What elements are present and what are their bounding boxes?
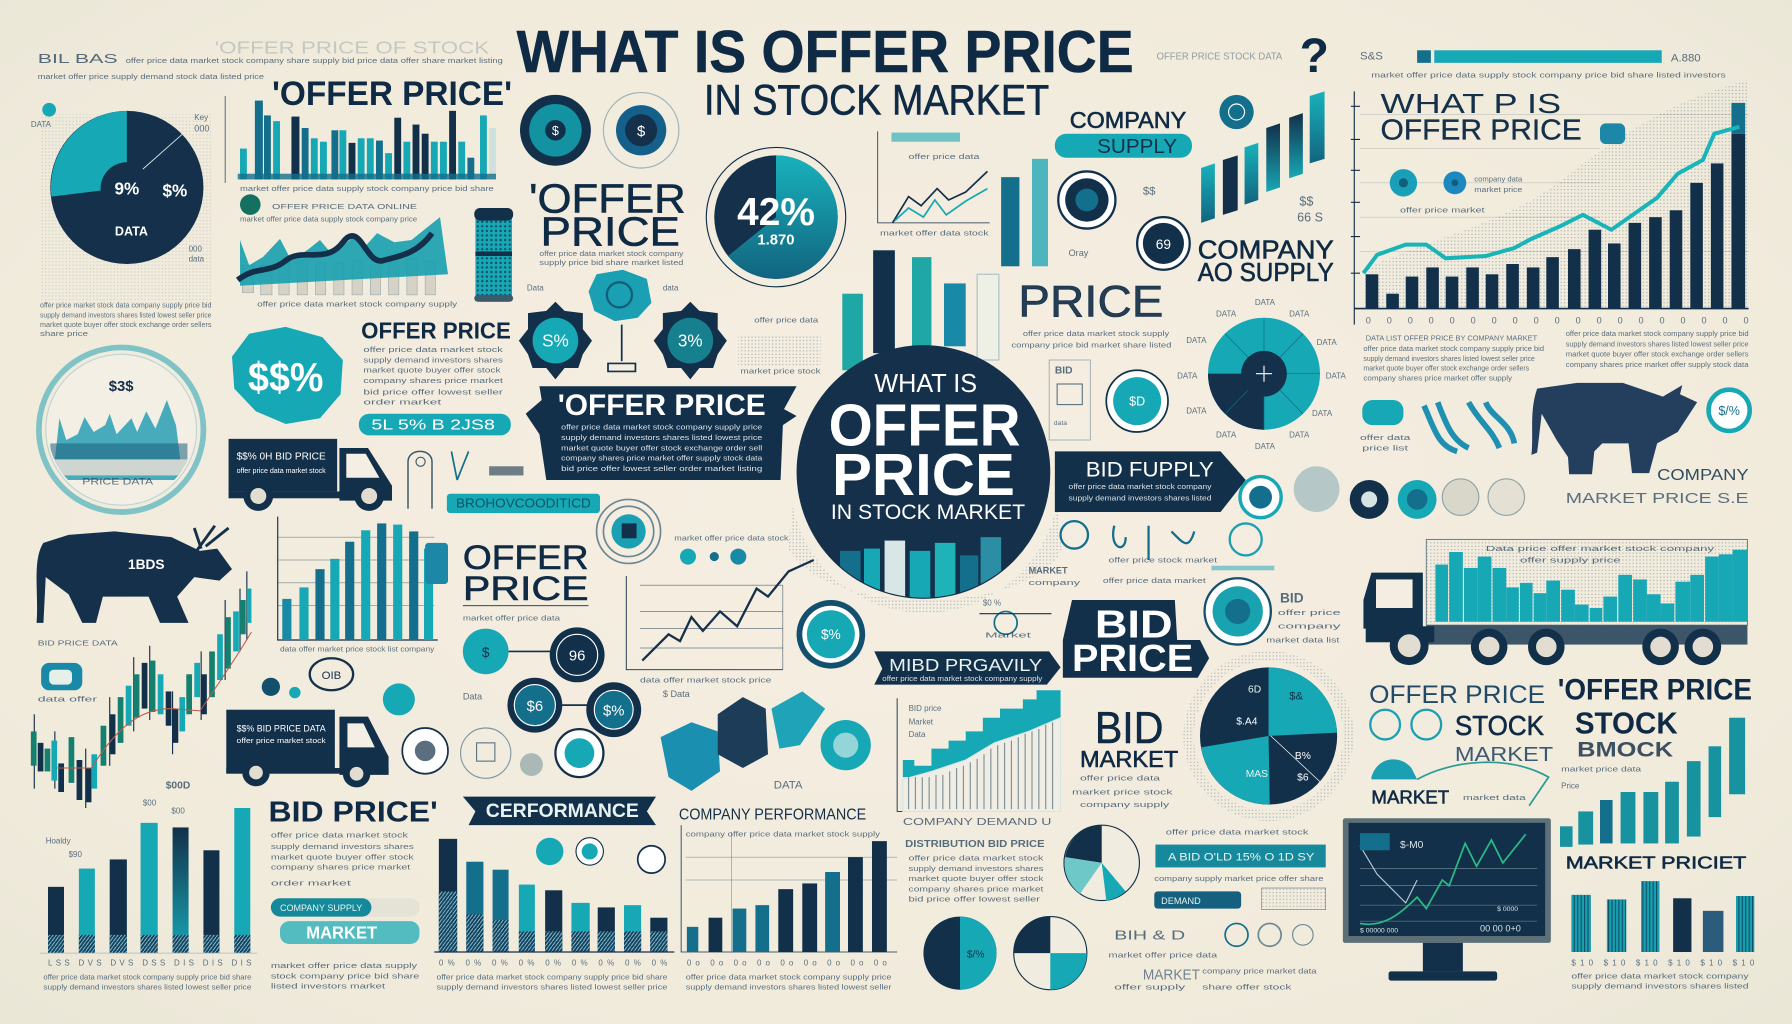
connected circle badges: $% (603, 703, 624, 719)
icons: small left group: OIB (322, 670, 341, 682)
title (517, 18, 1329, 123)
panel: teal bars with text: company supply market price offer share (1154, 874, 1323, 883)
heading: company supply pill: SUPPLY (1097, 135, 1177, 158)
small text block with box: market price stock (741, 367, 821, 376)
circle: skyline: PRICE DATA (82, 477, 154, 487)
big rising chart: OFFER PRICE (1381, 114, 1582, 146)
heading: offer price stock market left: STOCK (1455, 710, 1544, 741)
top-left header strip (38, 38, 503, 81)
badge: teal ring: $% (821, 627, 841, 642)
text block: left: market quote buyer offer stock exchange order sellers (40, 320, 212, 329)
ribbon: offer price (526, 386, 797, 480)
panel: teal bars with text: A BID O'LD 15% O 1D SY (1168, 852, 1315, 864)
text block: left: share price (40, 329, 88, 338)
ribbon: offer price: offer price data market stock company supply price (561, 423, 762, 432)
pie chart: top left: Key (194, 113, 208, 122)
radial pie with labels: DATA (1317, 338, 1337, 347)
text and icons: bottom centre-right: market offer price data (1109, 951, 1218, 960)
top-right progress strip: market offer price data supply stock company price bid share listed investors (1371, 71, 1726, 80)
title: OFFER PRICE STOCK DATA (1157, 51, 1282, 62)
small text block with box (738, 315, 821, 376)
ribbon: offer price: supply demand investors shares listed lowest price (561, 433, 762, 442)
radial pie with labels: DATA (1216, 310, 1237, 319)
text block: bid price: BID PRICE' (269, 797, 438, 829)
text block: left (40, 300, 212, 338)
top-left header strip: offer price data market stock company share supply bid price data offer share market listing (126, 56, 503, 65)
chart: teal steps: Market (909, 718, 934, 727)
text block: bid price: COMPANY SUPPLY (280, 903, 362, 913)
pie chart: big quadrants: B% (1295, 751, 1311, 762)
heading: offer price stock market left (1369, 681, 1554, 807)
blue wave icons and row of circles (1240, 400, 1525, 519)
text block: offer price: company shares price market (363, 376, 503, 385)
radial pie with labels: DATA (1255, 442, 1276, 451)
bar chart: bottom right striped: offer price data market stock company (1571, 971, 1749, 980)
connected circle badges (461, 627, 641, 778)
badge: bid price: BID (1095, 604, 1173, 647)
heading: bid market: offer price data (1080, 774, 1161, 783)
text and icons: bottom centre-right: BIH & D (1114, 928, 1185, 942)
area chart with label and can icon: offer price data market stock company supply (257, 299, 458, 308)
heading: offer price stock market left: MARKET (1455, 743, 1554, 766)
heading: offer price lower: OFFER (463, 539, 589, 577)
radial pie with labels: DATA (1216, 431, 1237, 440)
circle: skyline (39, 347, 203, 512)
pie charts: small trio: $/% (967, 950, 985, 961)
bar chart: bottom left: LSS DVS DVS DSS DIS DIS DIS (48, 959, 251, 968)
icons and text near badge: company (1278, 622, 1341, 631)
blue wave icons and row of circles: offer data (1360, 433, 1412, 442)
icon: small teal medallion with box: data (1054, 420, 1067, 427)
big percentage circle: 1.870 (757, 233, 795, 249)
bar chart: company performance: supply demand investors shares listed lowest seller (686, 983, 892, 992)
ribbon: offer price: bid price offer lowest seller order market listing (561, 464, 762, 473)
text block: offer price (359, 317, 511, 435)
ribbon: bid supply (1055, 451, 1246, 512)
bar chart: bottom right striped: supply demand investors shares listed (1571, 982, 1749, 991)
stock monitor (1343, 818, 1551, 981)
panel: teal bars with text: DEMAND (1161, 896, 1201, 906)
text block: offer price: supply demand investors shares (363, 355, 503, 364)
pie chart: top left: data (189, 255, 205, 264)
text block: offer price: OFFER PRICE (361, 317, 511, 343)
text blocks under big chart: supply demand investors shares listed lowest seller price (1566, 339, 1749, 348)
radial pie with labels: DATA (1186, 407, 1207, 416)
text blocks under big chart (1363, 329, 1749, 383)
icons and text near badge: offer price (1278, 608, 1341, 617)
icons: company circles: $$ (1143, 185, 1156, 197)
pie chart: big quadrants (1189, 656, 1349, 816)
pie chart: big quadrants: $.A4 (1236, 717, 1258, 728)
bar chart: bottom left: $00 (171, 807, 185, 816)
bar chart: bottom right striped: $10 $10 $10 $10 $10 $10 (1571, 959, 1755, 968)
central circle: WHAT IS (874, 368, 977, 398)
bull: right: COMPANY (1657, 467, 1749, 484)
pie chart: big quadrants: MAS (1246, 769, 1268, 780)
big rising chart: offer price market (1400, 206, 1485, 215)
heading: offer price lower: market offer price data (463, 614, 561, 623)
heading: company supply: AO SUPPLY (1198, 257, 1334, 287)
ribbon: performance: CERFORMANCE (486, 800, 639, 822)
ribbon: bid supply: supply demand investors shares listed (1069, 494, 1211, 503)
text block: bottom centre-right: bid price offer lowest seller (909, 895, 1041, 904)
radial pie with labels: DATA (1289, 431, 1310, 440)
heading: price: company price bid market share listed (1011, 340, 1171, 349)
badge: teal splotch: Data (527, 283, 544, 292)
pie chart: top left: 9% (114, 178, 139, 198)
big percentage circle (706, 147, 846, 287)
heading: bid market: BID (1095, 704, 1163, 753)
heading: bid market: MARKET (1080, 746, 1178, 772)
badge: teal ring (797, 600, 865, 669)
icons: centre lower cluster: company (1029, 578, 1080, 587)
line chart: top centre (878, 131, 990, 237)
heading: bid market: company supply (1080, 800, 1170, 809)
text blocks under big chart: company shares price market offer supply (1363, 374, 1512, 383)
text block: bottom centre-right: company shares price market (909, 884, 1043, 893)
ribbon: mibd prgavily: offer price data market stock company supply (882, 674, 1043, 683)
text block: bid price: order market (271, 879, 351, 888)
badge: teal splotch: data (663, 283, 679, 292)
heading: offer price centre-left: 'OFFER (529, 176, 686, 222)
title: ? (1300, 30, 1329, 83)
ribbon: bid supply: offer price data market stock company (1069, 482, 1212, 491)
bar chart: bottom centre: 0% 0% 0% 0% 0% 0% 0% 0% 0% (439, 959, 667, 968)
bar chart: company performance: offer price data market stock company supply price (686, 972, 891, 981)
heading: offer price stock market left: MARKET (1371, 786, 1449, 807)
bar chart: company performance: COMPANY PERFORMANCE (679, 806, 866, 823)
circle: skyline: $3$ (109, 379, 134, 395)
icons: top circular badges (520, 93, 679, 168)
text block: bid price: stock company price bid share (271, 971, 419, 980)
blue wave icons and row of circles: price list (1362, 443, 1408, 452)
heading: offer price stock right with rising bars: STOCK (1575, 706, 1678, 741)
line chart: top centre: offer price data (909, 152, 981, 161)
heading: company supply (1198, 234, 1334, 287)
icons: small sketch group (408, 451, 523, 509)
bull: right (1531, 383, 1750, 507)
text block: left: supply demand investors shares listed lowest seller price (40, 311, 211, 320)
icons: small left group (38, 658, 415, 715)
stock monitor: $ 0000 (1497, 906, 1518, 913)
heading: company supply pill: COMPANY (1070, 107, 1186, 133)
text block: bid price: market offer price data supply (271, 961, 418, 970)
bar chart: lower left-centre: data offer market price stock list company (280, 644, 435, 653)
ribbon: offer price: market quote buyer offer stock exchange order sell (561, 443, 763, 452)
chart: teal steps: Data (909, 730, 926, 739)
icons: centre lower cluster: offer price data market (1103, 576, 1206, 585)
stock monitor: 00 00 0+0 (1480, 923, 1521, 933)
bar chart: bottom left: $00D (166, 781, 190, 792)
badges: gears with values (519, 302, 727, 379)
tilted rising bars: $$ (1299, 195, 1313, 209)
text block: offer price: offer price data market stock (363, 345, 503, 354)
text and icons: bottom centre-right: MARKET (1143, 967, 1200, 983)
text block: offer price: order market (363, 398, 441, 407)
bull: right: $/% (1718, 404, 1740, 418)
icons: company circles: 69 (1156, 237, 1171, 252)
pie chart: top left: $% (162, 181, 187, 201)
bar chart: bottom left: $00 (143, 799, 157, 808)
small text block with box: offer price data (754, 315, 819, 324)
truck: upper left: $$% 0H BID PRICE (237, 451, 326, 462)
heading: bid market (1072, 704, 1178, 809)
icons: top circular badges: $ (637, 124, 646, 140)
icons: company circles: Oray (1069, 248, 1089, 258)
big rising chart: WHAT P IS (1381, 88, 1561, 119)
text block: bottom centre-right: DISTRIBUTION BID PRICE (905, 839, 1045, 850)
text block: bottom centre-right (905, 839, 1045, 904)
heading: offer price stock right with rising bars: BMOCK (1577, 737, 1674, 762)
bar chart: bottom centre (434, 838, 674, 992)
icons and text near badge: market data list (1266, 635, 1339, 644)
heading: offer price centre-left (529, 176, 686, 267)
radial pie with labels: DATA (1186, 336, 1207, 345)
pill: teal label (447, 494, 600, 513)
icon: concentric circle: market offer price data stock (674, 534, 789, 543)
central circle: OFFER (829, 392, 1021, 459)
icons: top circular badges: $ (552, 124, 559, 138)
pill: teal label: BROHOVCOODITICD (456, 496, 591, 510)
text block: bid price: company shares price market (271, 863, 410, 872)
bar chart: bottom centre: supply demand investors shares listed lowest seller price (437, 983, 667, 992)
big rising chart (1351, 80, 1749, 325)
heading: offer price centre-left: supply price bid share market listed (539, 258, 683, 267)
ribbon: offer price: company shares price market offer supply stock data (561, 454, 763, 463)
pie chart: big quadrants: 6D (1248, 685, 1261, 696)
icon: small teal medallion with box: BID (1055, 366, 1073, 377)
connected circle badges: $6 (527, 699, 543, 715)
text block: left: offer price market stock data company supply price bid (40, 300, 211, 309)
pie chart: big quadrants: $& (1289, 690, 1303, 702)
text block: bottom centre-right: supply demand investors shares (909, 864, 1044, 873)
truck: upper left (229, 439, 392, 511)
big rising chart: market price (1474, 185, 1522, 194)
stock monitor: $-M0 (1400, 840, 1424, 851)
text and icons: bottom centre-right (1109, 923, 1318, 992)
pie chart: top left (31, 103, 211, 303)
text block: bid price: MARKET (306, 922, 378, 942)
radial pie with labels (1177, 298, 1347, 451)
text block: offer price: 5L 5% B 2JS8 (371, 418, 495, 434)
top-right progress strip: S&S (1360, 50, 1383, 62)
pie chart: top left: DATA (115, 224, 148, 238)
tilted rising bars: 66 S (1297, 211, 1323, 225)
icons and text near badge: Market (985, 631, 1031, 640)
truck: lower left: offer price market stock (237, 736, 326, 745)
truck: lower left: $$% BID PRICE DATA (237, 723, 327, 733)
stock monitor: $ 00000 000 (1360, 928, 1398, 935)
heading: price: PRICE (1018, 278, 1163, 327)
bull: lower left: 1BDS (128, 557, 165, 572)
line chart: lower centre: data offer market stock price (640, 675, 771, 684)
icons and text near badge (979, 578, 1341, 645)
pie chart: big quadrants: $6 (1297, 773, 1309, 784)
connected circle badges: Data (463, 691, 483, 701)
bull: lower left (37, 526, 232, 623)
big truck: offer supply price (1520, 555, 1621, 564)
area chart with label and can icon: OFFER PRICE DATA ONLINE (272, 202, 417, 211)
truck: upper left: offer price data market stock (237, 466, 326, 475)
bar chart: company performance (679, 806, 897, 992)
teal and navy blob icons (661, 689, 871, 792)
line chart: lower centre (626, 560, 814, 684)
icons and text near badge: $0 % (983, 599, 1001, 608)
text blocks under big chart: DATA LIST OFFER PRICE BY COMPANY MARKET (1366, 334, 1538, 343)
text blocks under big chart: company shares price market offer supply stock data (1566, 360, 1749, 369)
big percentage circle: 42% (737, 191, 815, 234)
teal and navy blob icons: $ Data (663, 689, 691, 699)
badge: bid price: PRICE (1072, 637, 1193, 679)
top-left header strip: 'OFFER PRICE OF STOCK (215, 38, 490, 58)
heading: offer price centre-left: PRICE (541, 209, 680, 255)
text blocks under big chart: supply demand investors shares listed lowest seller price (1363, 354, 1535, 363)
bar chart: lower left-centre (278, 517, 448, 653)
bar chart: bottom left: $90 (69, 850, 82, 859)
top-left header strip: market offer price supply demand stock data listed price (38, 72, 264, 81)
big rising chart: 0 0 0 0 0 0 0 0 0 0 0 0 0 0 0 0 0 0 0 (1366, 315, 1749, 325)
text blocks under big chart: offer price data market stock company supply price bid (1363, 344, 1544, 353)
bull: right: MARKET PRICE S.E (1566, 491, 1749, 507)
bar chart: company performance: company offer price data market stock supply (686, 830, 880, 839)
text block: bottom centre-right: market quote buyer offer stock (909, 874, 1044, 883)
top-right progress strip (1360, 50, 1726, 80)
pie charts: small trio (923, 825, 1139, 990)
text block: bid price: listed investors market (271, 982, 385, 991)
icons: centre lower cluster (1029, 521, 1274, 587)
text block: bid price: market quote buyer offer stock (271, 852, 414, 861)
heading: offer price stock right with rising bars: Price (1561, 782, 1580, 791)
heading: bid market: market price stock (1072, 787, 1173, 796)
bar chart: bottom left (40, 781, 257, 992)
pie chart: top left: 000 (194, 123, 210, 133)
central circle: IN STOCK MARKET (831, 499, 1025, 524)
text and icons: bottom centre-right: offer supply (1114, 983, 1186, 992)
icons and text near badge: BID (1280, 590, 1304, 605)
text block: offer price: market quote buyer offer stock (363, 366, 501, 375)
radial pie with labels: DATA (1312, 409, 1333, 418)
text and icons: bottom centre-right: company price market data (1202, 967, 1318, 976)
bar chart: top: market offer price data supply stock company price bid share (240, 184, 494, 193)
heading: market price: MARKET PRICIET (1566, 853, 1747, 873)
text blocks under big chart: market quote buyer offer stock exchange order sellers (1363, 363, 1529, 372)
bar chart: top (225, 96, 496, 193)
heading: company supply pill (1055, 107, 1192, 158)
bar chart: bottom right striped (1571, 881, 1755, 991)
radial pie with labels: DATA (1177, 371, 1198, 380)
icon: small teal medallion with box (1049, 360, 1168, 440)
badge: teal splotch (527, 270, 679, 321)
top-right progress strip: A.880 (1671, 53, 1701, 65)
heading: offer price quoted: 'OFFER PRICE' (272, 75, 512, 113)
icons: centre lower cluster: MARKET (1029, 566, 1068, 576)
bar chart: bottom centre: offer price data market stock company supply price bid share (437, 972, 667, 981)
radial pie with labels: DATA (1289, 310, 1310, 319)
heading: offer price stock market left: OFFER PRICE (1369, 681, 1545, 709)
chart: teal steps: BID price (909, 704, 942, 713)
heading: price (1011, 278, 1171, 349)
heading: company supply: COMPANY (1198, 234, 1334, 264)
bar chart: bottom left: supply demand investors shares listed lowest seller price (43, 983, 251, 992)
bar chart: bottom left: offer price data market stock company supply price bid share (43, 972, 251, 981)
heading: offer price stock right with rising bars: 'OFFER PRICE (1558, 673, 1752, 706)
top-left header strip: BIL BAS (38, 52, 118, 66)
badges: gears with values: S% (542, 330, 569, 350)
text block: bid price: supply demand investors shares (271, 842, 414, 851)
text and icons: bottom centre-right: share offer stock (1202, 983, 1292, 992)
heading: offer price stock market left: market data (1463, 793, 1527, 802)
panel: teal bars with text (1154, 827, 1326, 910)
truck: lower left (226, 710, 448, 787)
badges: gears with values: 3% (678, 330, 703, 350)
heading: offer price lower: PRICE (463, 570, 589, 608)
title: IN STOCK MARKET (704, 76, 1049, 123)
heading: price: offer price data market stock supply (1023, 329, 1170, 338)
area chart with label and can icon: market offer price data supply stock company price (240, 215, 417, 224)
text block: bid price: offer price data market stock (271, 831, 408, 840)
tilted rising bars (1201, 91, 1325, 225)
ribbon: offer price: 'OFFER PRICE (558, 389, 766, 422)
radial pie with labels: DATA (1255, 298, 1276, 307)
central circle: PRICE (832, 441, 1015, 508)
heading: offer price lower (463, 539, 589, 623)
badge: dollar percent splash: $$% (248, 354, 323, 400)
chart: teal steps: COMPANY DEMAND U (903, 817, 1051, 828)
ribbon: mibd prgavily: MIBD PRGAVILY (889, 655, 1043, 675)
line chart: top centre: market offer data stock (880, 228, 989, 237)
connected circle badges: $ (482, 645, 490, 660)
bar chart: company performance: 0o 0o 0o 0o 0o 0o 0o 0o 0o (687, 959, 887, 968)
pie chart: top left: 000 (189, 244, 202, 253)
ribbon: mibd prgavily (874, 651, 1061, 685)
icons: small left group: data offer (38, 695, 98, 704)
heading: offer price stock right with rising bars (1558, 673, 1752, 847)
icons: company circles (1058, 95, 1254, 270)
cylinders and tall bars (842, 159, 1048, 370)
pie chart: top left: DATA (31, 120, 52, 129)
big truck: Data price offer market stock company (1486, 544, 1715, 553)
ribbon: performance (463, 797, 656, 825)
big rising chart: company data (1474, 175, 1523, 184)
big truck (1363, 539, 1747, 665)
heading: offer price centre-left: offer price data market stock company (539, 249, 684, 258)
icons: centre lower cluster: offer price stock market (1109, 555, 1217, 564)
area chart with label and can icon (238, 194, 513, 308)
icon: small teal medallion with box: $D (1129, 395, 1145, 409)
central circle (789, 345, 1063, 613)
badge: bid price (1063, 600, 1209, 679)
text block: bottom centre-right: offer price data market stock (909, 854, 1044, 863)
heading: offer price stock right with rising bars: market price data (1561, 764, 1642, 773)
text block: offer price: bid price offer lowest seller (363, 387, 504, 396)
connected circle badges: 96 (569, 649, 585, 665)
candlestick chart: BID PRICE DATA (38, 639, 118, 648)
text block: bid price (269, 797, 438, 991)
bar chart: bottom left: Hoaldy (46, 836, 71, 845)
text blocks under big chart: market quote buyer offer stock exchange order sellers (1566, 350, 1749, 359)
teal and navy blob icons: DATA (774, 780, 803, 792)
chart: teal steps (897, 690, 1061, 828)
panel: teal bars with text: offer price data market stock (1166, 827, 1309, 836)
ribbon: bid supply: BID FUPPLY (1086, 457, 1214, 482)
candlestick chart (31, 571, 251, 808)
text blocks under big chart: offer price data market stock company supply price bid (1566, 329, 1749, 338)
badge: dollar percent splash (232, 327, 343, 424)
title: WHAT IS OFFER PRICE (517, 18, 1134, 85)
radial pie with labels: DATA (1326, 371, 1347, 380)
icon: concentric circle (597, 499, 789, 565)
